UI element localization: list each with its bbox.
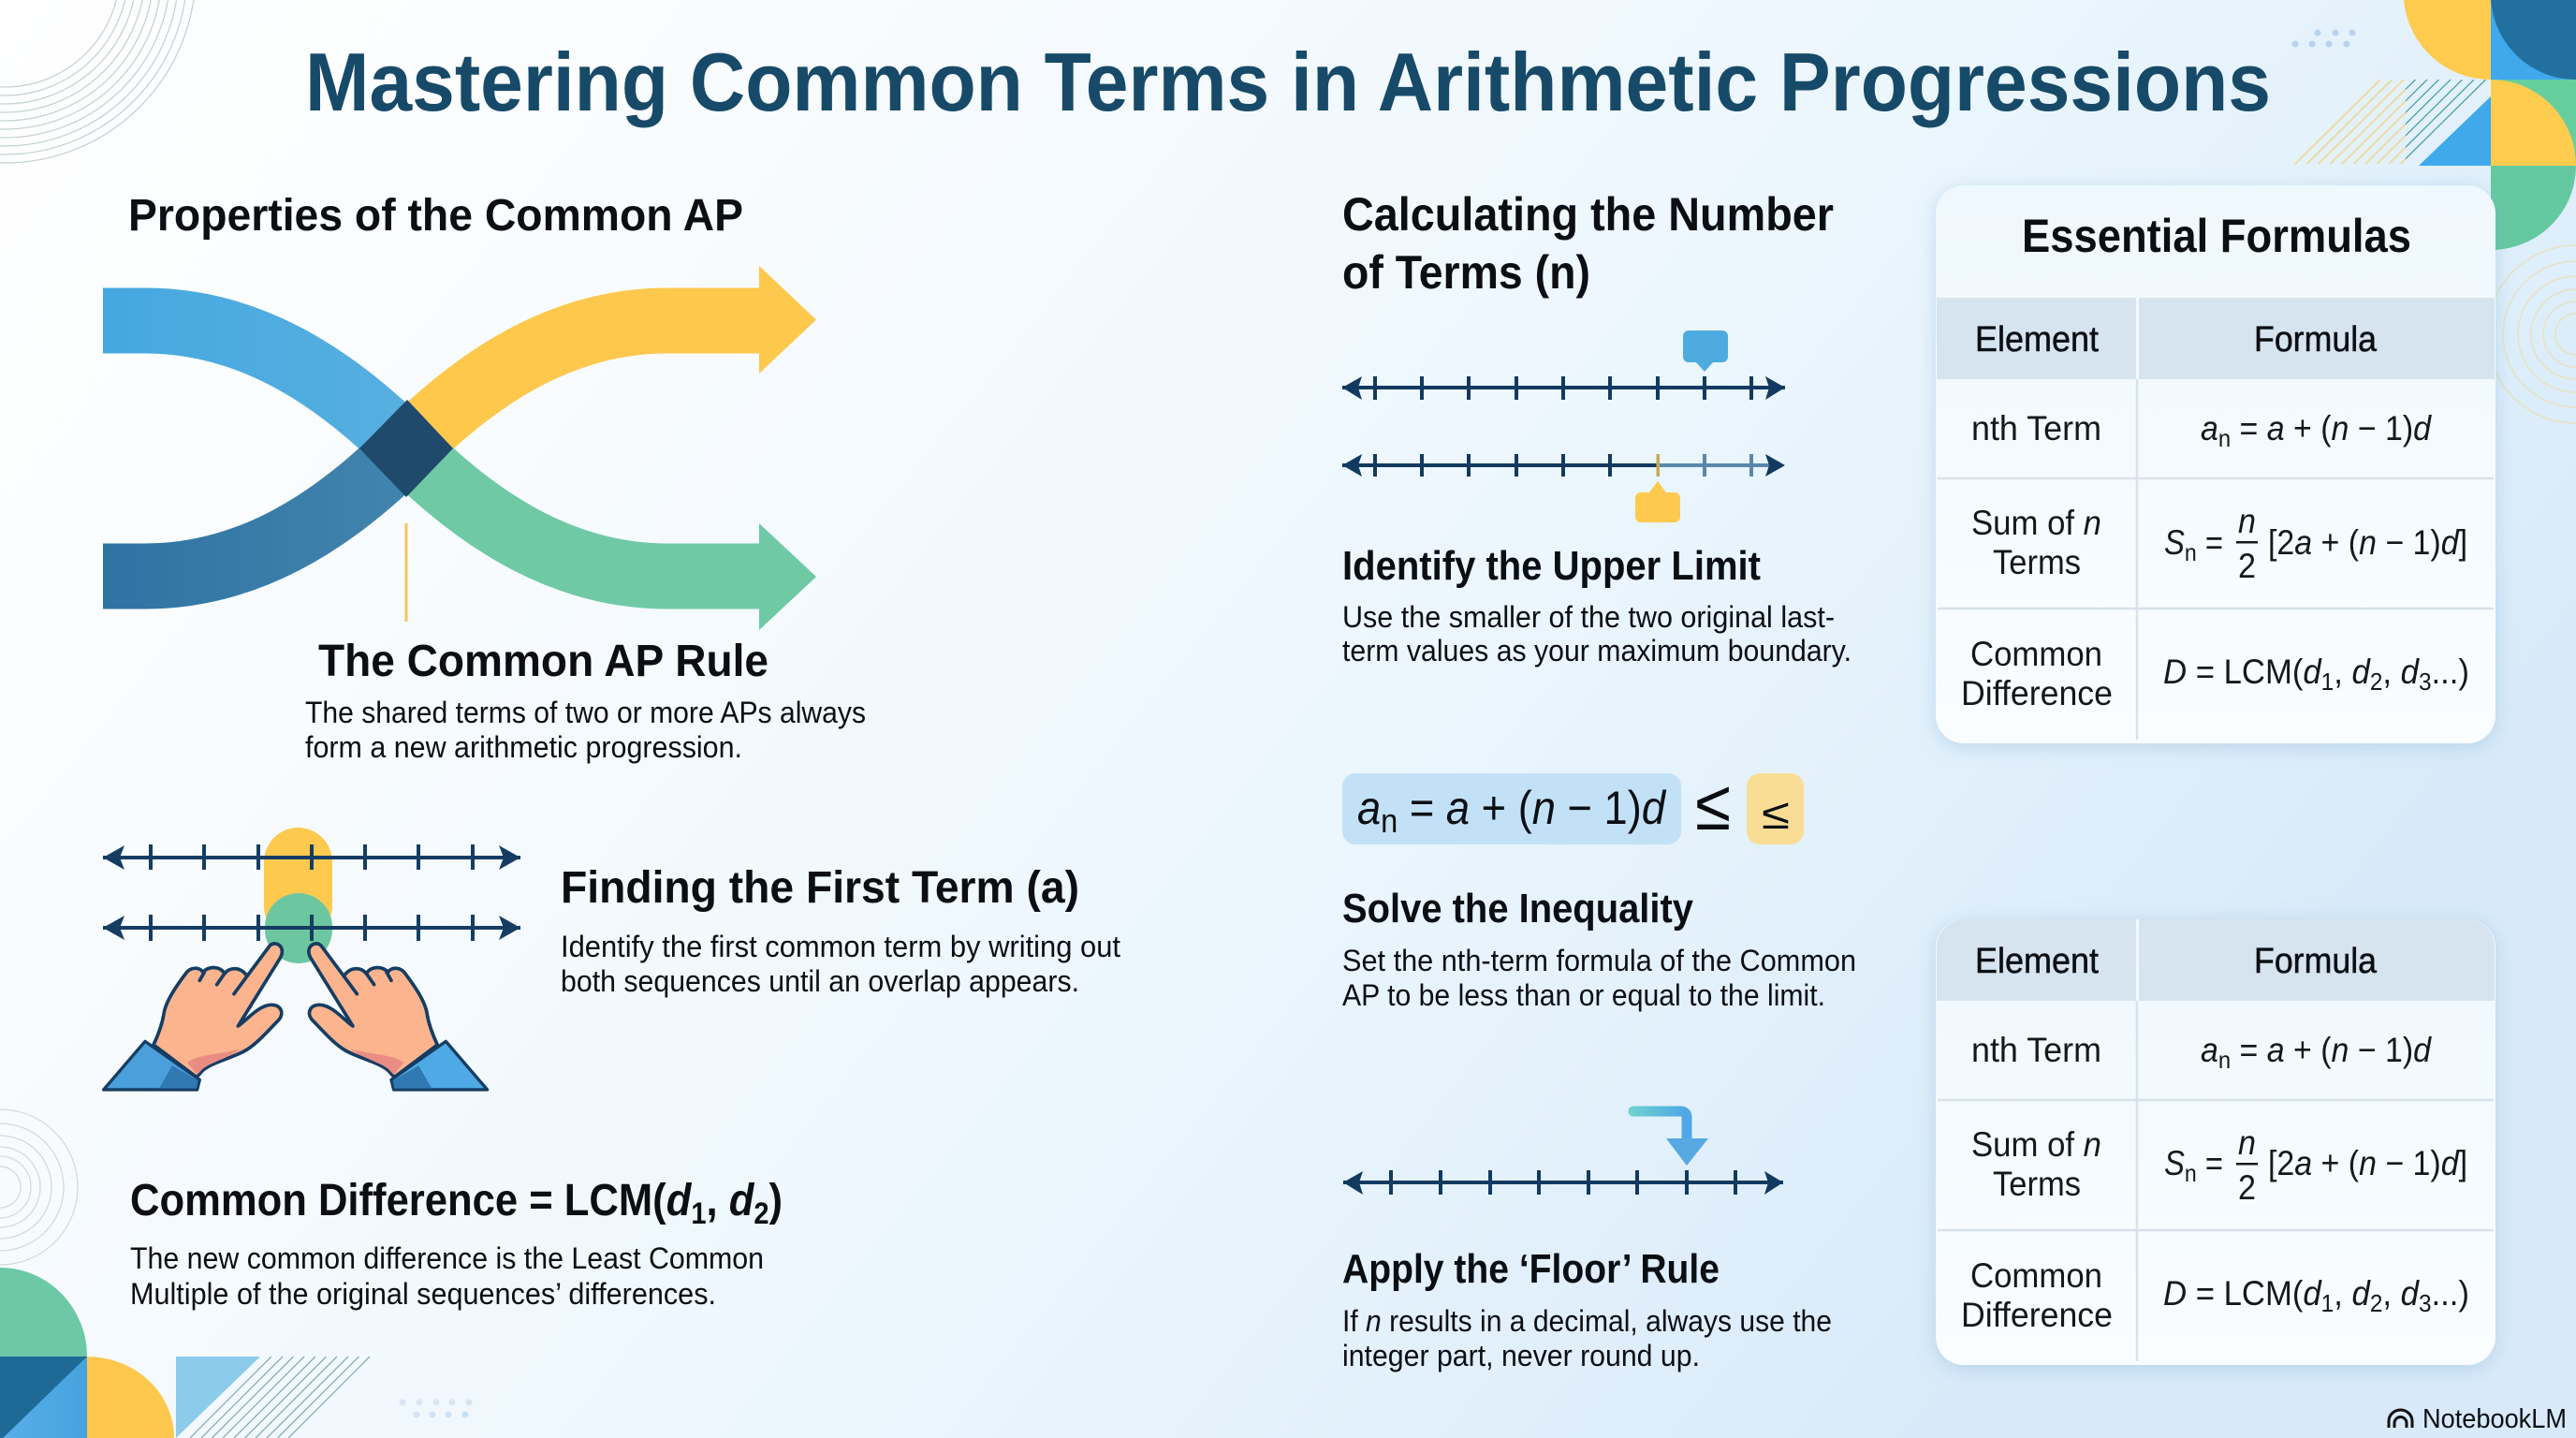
watermark: NotebookLM: NotebookLM xyxy=(2422,1404,2567,1434)
decoration: bottom-left rings xyxy=(0,1109,78,1265)
decoration: bottom-left geometric tiles xyxy=(0,1268,260,1438)
heading: calculating the number of terms: of Terms (n) xyxy=(1342,246,1590,299)
row: common difference: Common xyxy=(1970,635,2102,673)
inequality formula: ≤ xyxy=(1695,766,1731,845)
text: the common AP rule xyxy=(305,637,866,764)
row: sum of n terms: Terms xyxy=(1993,543,2081,581)
decoration: right rings xyxy=(2487,245,2576,423)
first term number lines and hands xyxy=(103,828,520,1090)
table header xyxy=(1937,919,2495,1001)
text: solve the inequality: Solve the Inequality xyxy=(1342,886,1693,932)
text: the common AP rule: The shared terms of two or more APs always xyxy=(305,696,866,729)
row: common difference: 3 xyxy=(2419,668,2432,696)
text: common difference: ) xyxy=(768,1176,783,1225)
table header: Formula xyxy=(2254,320,2378,360)
row: common difference: Difference xyxy=(1961,1296,2113,1334)
row: sum of n terms: 2 xyxy=(2238,1168,2256,1207)
text: identify the upper limit xyxy=(1342,543,1852,668)
row: common difference: , xyxy=(2334,1274,2352,1313)
row: sum of n terms xyxy=(1971,502,2467,585)
text: finding the first term: Identify the first common term by writing out xyxy=(561,930,1120,963)
text: apply the floor rule: If n results in a decimal, always use the xyxy=(1342,1304,1832,1338)
row: common difference: , xyxy=(2382,1274,2401,1313)
row: nth term: a + (n − 1)d xyxy=(2267,409,2433,448)
row: nth term: nth Term xyxy=(1971,1031,2101,1069)
crossing arrows diagram xyxy=(103,266,816,630)
row: sum of n terms: 2 xyxy=(2238,547,2256,585)
decoration: top-right geometric tiles xyxy=(2404,0,2576,250)
row: sum of n terms: Sum of n xyxy=(1971,504,2101,542)
row: common difference: 2 xyxy=(2370,1289,2382,1317)
text: solve the inequality: Set the nth-term formula of the Common xyxy=(1342,944,1856,977)
text: apply the floor rule: Apply the ‘Floor’ Rule xyxy=(1342,1246,1720,1292)
heading: calculating the number of terms: Calculating the Number xyxy=(1342,188,1834,241)
row: nth term: nth Term xyxy=(1971,409,2101,448)
table header xyxy=(1937,298,2495,379)
row: sum of n terms xyxy=(1971,1123,2467,1207)
text: solve the inequality: AP to be less than or equal to the limit. xyxy=(1342,978,1825,1012)
row: common difference: ...) xyxy=(2432,653,2469,691)
row: sum of n terms: = xyxy=(2197,523,2223,562)
row: nth term: a xyxy=(2201,409,2218,448)
inequality formula xyxy=(1342,766,1804,845)
row: common difference: d xyxy=(2401,653,2420,691)
row: sum of n terms: S xyxy=(2164,523,2185,562)
text: finding the first term: Finding the First Term (a) xyxy=(561,863,1079,913)
heading: properties: Properties of the Common AP xyxy=(128,191,743,241)
inequality formula: = xyxy=(1398,782,1446,834)
row: sum of n terms: = xyxy=(2197,1144,2223,1182)
table header: Formula xyxy=(2254,942,2378,981)
row: sum of n terms: Terms xyxy=(1993,1165,2081,1203)
decoration: top-right stripes xyxy=(2295,80,2486,164)
row: common difference: Difference xyxy=(1961,674,2113,712)
row: sum of n terms: Sum of n xyxy=(1971,1125,2101,1164)
icon: right hand xyxy=(309,944,488,1090)
row: common difference: , xyxy=(2382,653,2401,691)
row: common difference: d xyxy=(2352,1274,2371,1313)
table header: Element xyxy=(1975,942,2099,981)
row: common difference xyxy=(1961,1256,2469,1334)
text: common difference: Common Difference = LCM(d xyxy=(130,1176,721,1225)
text: common difference: 2 xyxy=(754,1196,768,1230)
text: the common AP rule: form a new arithmetic progression. xyxy=(305,730,742,764)
text: identify the upper limit: term values as your maximum boundary. xyxy=(1342,634,1852,668)
row: sum of n terms: [2a + (n − 1)d] xyxy=(2268,1144,2467,1182)
icon: left hand xyxy=(104,944,282,1090)
row: sum of n terms: n xyxy=(2238,1123,2256,1162)
inequality formula: a xyxy=(1357,782,1381,834)
row: common difference xyxy=(1961,635,2469,712)
inequality formula: ≤ xyxy=(1762,789,1790,838)
row: common difference: D = LCM(d xyxy=(2163,653,2322,691)
floor rule number line and arrow xyxy=(1343,1111,1783,1195)
text: identify the upper limit: Use the smaller of the two original last- xyxy=(1342,600,1835,634)
text: apply the floor rule: integer part, never round up. xyxy=(1342,1339,1700,1372)
title: Mastering Common Terms in Arithmetic Progressions xyxy=(305,36,2271,128)
text: common difference: , xyxy=(706,1176,729,1225)
marker: blue bubble xyxy=(1683,330,1728,372)
row: common difference: , xyxy=(2334,653,2352,691)
row: common difference: 1 xyxy=(2321,1289,2334,1317)
panel: essential formulas table xyxy=(1936,185,2496,743)
row: nth term: a xyxy=(2201,1031,2218,1069)
decoration: top-left rings xyxy=(0,0,196,163)
text: finding the first term: both sequences until an overlap appears. xyxy=(561,964,1079,998)
inequality formula: a + (n − 1)d xyxy=(1446,782,1668,834)
text: solve the inequality xyxy=(1342,886,1856,1012)
marker: yellow bubble xyxy=(1635,481,1680,522)
row: nth term: n xyxy=(2218,1046,2231,1074)
row: nth term: a + (n − 1)d xyxy=(2267,1031,2433,1069)
row: sum of n terms: S xyxy=(2164,1144,2185,1182)
panel: second formula table xyxy=(1936,919,2496,1365)
table header: Element xyxy=(1975,320,2099,360)
row: common difference: ...) xyxy=(2432,1274,2469,1313)
inequality formula: n xyxy=(1381,801,1398,840)
row: common difference: d xyxy=(2401,1274,2420,1313)
text: common difference: Multiple of the original sequences’ differences. xyxy=(130,1277,716,1311)
text: common difference: d xyxy=(729,1176,755,1225)
text: the common AP rule: The Common AP Rule xyxy=(318,637,768,686)
heading: essential formulas: Essential Formulas xyxy=(2022,210,2411,262)
row: common difference: 3 xyxy=(2419,1289,2432,1317)
row: sum of n terms: [2a + (n − 1)d] xyxy=(2268,523,2467,562)
row: common difference: 1 xyxy=(2321,668,2334,696)
decoration: top-right dots xyxy=(2291,30,2355,47)
icon: bent floor arrow xyxy=(1633,1111,1708,1166)
text: common difference: The new common difference is the Least Common xyxy=(130,1241,764,1275)
row: sum of n terms: n xyxy=(2185,538,2197,566)
row: common difference: Common xyxy=(1970,1256,2102,1295)
row: common difference: 2 xyxy=(2370,668,2382,696)
text: finding the first term xyxy=(561,863,1120,998)
decoration: bottom-left dots xyxy=(399,1399,472,1417)
text: identify the upper limit: Identify the Upper Limit xyxy=(1342,543,1761,589)
heading: calculating the number of terms xyxy=(1342,188,1834,299)
text: common difference: 1 xyxy=(691,1196,706,1230)
row: common difference: D = LCM(d xyxy=(2163,1274,2322,1313)
decoration: bottom-left stripes xyxy=(190,1357,370,1438)
row: common difference: d xyxy=(2352,653,2371,691)
row: nth term xyxy=(1971,409,2432,452)
upper limit number lines xyxy=(1342,330,1785,522)
text: common difference xyxy=(130,1176,783,1311)
row: sum of n terms: n xyxy=(2185,1159,2197,1187)
row: nth term: = xyxy=(2231,409,2267,448)
row: sum of n terms: n xyxy=(2238,502,2256,540)
text: apply the floor rule xyxy=(1342,1246,1832,1372)
row: nth term: = xyxy=(2231,1031,2267,1069)
row: nth term: n xyxy=(2218,424,2231,452)
row: nth term xyxy=(1971,1031,2432,1074)
